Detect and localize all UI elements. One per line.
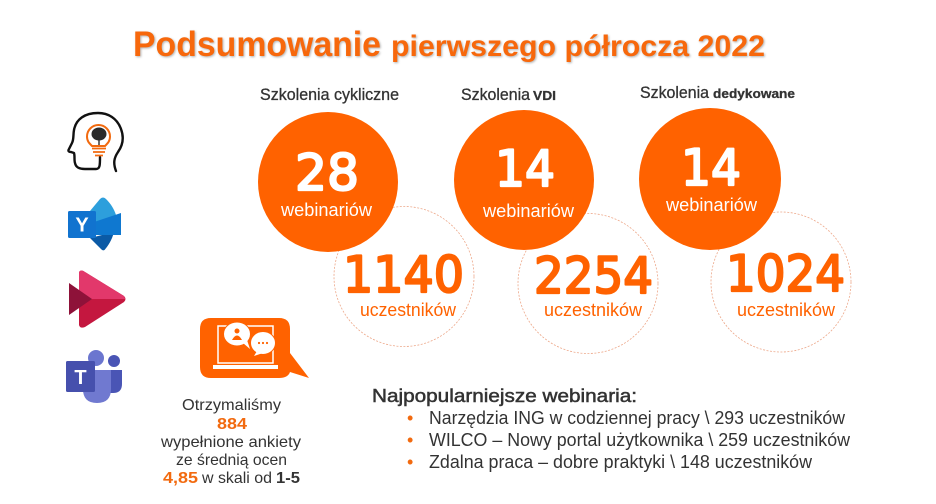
survey text block: ze średnią ocen bbox=[176, 452, 287, 469]
orange circle: 14 webinars dedicated bbox=[639, 108, 781, 250]
column heading: VDI: VDI bbox=[533, 88, 556, 103]
orange circle: 14 webinars dedicated: 14 bbox=[681, 139, 741, 197]
icon: Microsoft Stream bbox=[69, 270, 126, 328]
orange circle: 14 webinars VDI bbox=[454, 110, 594, 250]
icon: laptop speech bubble bbox=[200, 318, 309, 378]
popular webinars list: • bbox=[407, 452, 413, 472]
popular webinars list bbox=[372, 386, 851, 472]
orange circle: 14 webinars VDI: webinariów bbox=[482, 201, 575, 221]
icon: Microsoft Teams: T bbox=[74, 367, 87, 389]
orange circle: 28 webinars: 28 bbox=[295, 144, 359, 202]
icon: Yammer: Y bbox=[75, 214, 89, 236]
orange circle: 14 webinars VDI: 14 bbox=[495, 140, 555, 198]
survey text block: w skali od bbox=[201, 470, 272, 487]
icon: Microsoft Teams bbox=[66, 350, 122, 403]
title: Podsumowanie bbox=[133, 25, 381, 64]
survey text block: Otrzymaliśmy bbox=[182, 397, 281, 414]
participants: 2254: uczestników bbox=[544, 300, 643, 320]
column heading: dedykowane bbox=[640, 84, 795, 102]
survey text block: 884 bbox=[217, 416, 247, 433]
dashed circle: 1140 participants bbox=[334, 206, 474, 346]
title: pierwszego półrocza 2022 bbox=[391, 30, 765, 63]
dashed circle: 2254 participants bbox=[518, 214, 658, 354]
survey text block bbox=[160, 397, 301, 487]
icon: Yammer bbox=[68, 198, 121, 250]
popular webinars list: • bbox=[407, 408, 413, 428]
survey text block: 4,85 bbox=[163, 470, 198, 487]
icon: head with light bulb bbox=[68, 113, 123, 171]
column heading: VDI: Szkolenia bbox=[461, 86, 531, 104]
popular webinars list: • bbox=[407, 430, 413, 450]
participants: 1140: uczestników bbox=[360, 300, 457, 320]
popular webinars list: WILCO – Nowy portal użytkownika \ 259 uczestników bbox=[429, 430, 851, 450]
participants: 1024: uczestników bbox=[737, 300, 836, 320]
column heading: cykliczne: Szkolenia cykliczne bbox=[260, 86, 399, 104]
dashed circle: 1024 participants bbox=[711, 212, 851, 352]
orange circle: 14 webinars dedicated: webinariów bbox=[665, 195, 758, 215]
participants: 2254: 2254 bbox=[534, 247, 653, 305]
participants: 1024: 1024 bbox=[726, 245, 845, 303]
orange circle: 28 webinars: webinariów bbox=[280, 200, 373, 220]
participants: 1140: 1140 bbox=[343, 246, 464, 304]
column heading: dedykowane: dedykowane bbox=[713, 86, 795, 101]
column heading: dedykowane: Szkolenia bbox=[640, 84, 710, 102]
survey text block: 1-5 bbox=[276, 470, 300, 487]
orange circle: 28 webinars bbox=[258, 112, 398, 252]
popular webinars list: Narzędzia ING w codziennej pracy \ 293 uczestników bbox=[429, 408, 846, 428]
popular webinars list: Najpopularniejsze webinaria: bbox=[372, 386, 637, 406]
popular webinars list: Zdalna praca – dobre praktyki \ 148 uczestników bbox=[429, 452, 813, 472]
title bbox=[133, 25, 765, 64]
survey text block: wypełnione ankiety bbox=[160, 434, 301, 451]
